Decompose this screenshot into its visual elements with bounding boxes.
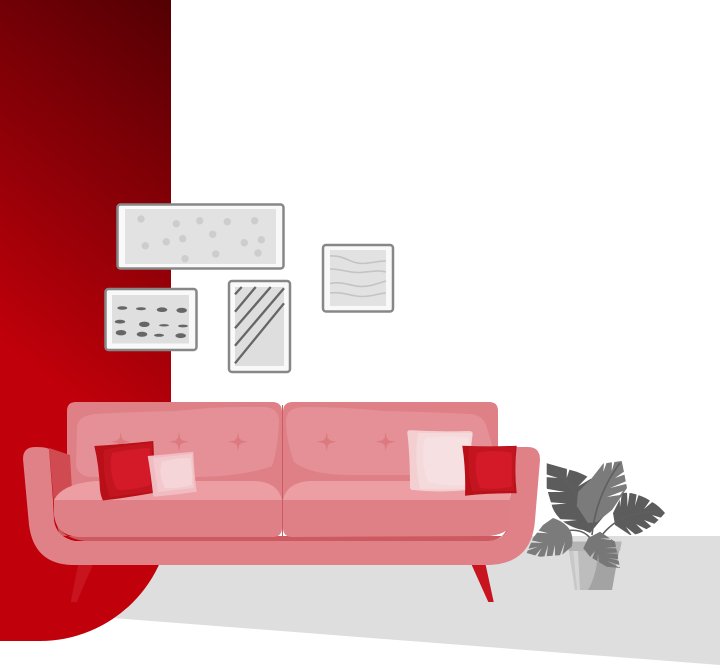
sofa back right	[283, 402, 498, 510]
pillow: red left	[94, 441, 154, 500]
sofa legs	[71, 565, 494, 602]
back patch right	[286, 407, 492, 475]
plant	[527, 461, 665, 590]
seat tops	[54, 481, 510, 505]
pillow: red right	[462, 446, 517, 496]
wall art: diagonal stripe frame	[229, 281, 290, 372]
floor	[100, 536, 720, 665]
leaf: mid upper right	[577, 461, 627, 523]
sofa centre seam	[282, 405, 284, 541]
sofa	[23, 402, 540, 602]
back patch left	[76, 407, 279, 477]
sofa body and arms	[23, 447, 540, 565]
plant pot	[568, 542, 622, 590]
wall art: dotted frame	[118, 204, 284, 268]
plant stems	[553, 468, 590, 538]
wall art: wavy line frame	[323, 245, 393, 312]
arm inner shade	[49, 448, 72, 505]
under seat shadow	[54, 515, 508, 541]
plant stems upper	[592, 463, 660, 535]
leaf: mid lower left	[527, 518, 573, 557]
leaf: dark right	[613, 493, 665, 535]
wall art: ellipse frame	[106, 289, 196, 350]
pillow: pale left	[148, 452, 197, 497]
leaf: mid lower centre	[583, 532, 620, 568]
red background shape	[0, 0, 171, 641]
pillow: pale right	[407, 430, 473, 492]
tufted buttons	[111, 432, 396, 451]
sofa back left	[67, 402, 282, 510]
leaf: dark upper left	[547, 463, 605, 533]
seat fronts	[54, 500, 512, 537]
